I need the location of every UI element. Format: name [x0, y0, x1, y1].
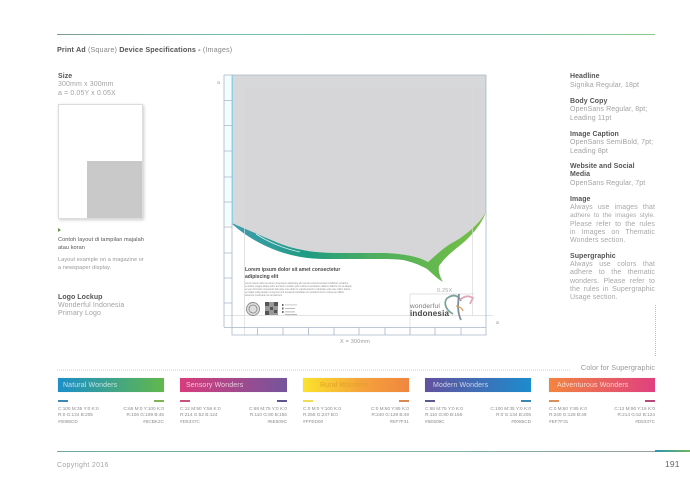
values: modern left: #6E509C: [425, 419, 445, 424]
website and social media specification: OpenSans Regular, 7pt: [570, 180, 645, 187]
supergraphic rules paragraph: the rules in Supergraphic: [570, 286, 655, 293]
values: rural left: R:255 G:237 B:0: [303, 412, 338, 417]
supergraphic swoosh: [232, 212, 486, 282]
ad body copy: et dolore magna aliqua enim ad minim veniam quis nostrud exercitation ullamco laboris nisi ut aliquip: [245, 285, 352, 288]
Wonderful Indonesia logo: wonderful: [409, 303, 440, 310]
ruler label right a: a: [496, 320, 499, 326]
values: rural right: [371, 406, 409, 424]
layout caption Indonesian: [58, 237, 144, 251]
values: sensory right: [249, 406, 287, 424]
image rules paragraph: in Images on Thematic: [570, 229, 655, 236]
layout caption Indonesian: Contoh layout di tampilan majalah: [58, 237, 144, 243]
values: sensory left: #D5337C: [180, 419, 200, 424]
values: adventurous left: C:0 M:60 Y:85 K:0: [549, 406, 587, 411]
image rules paragraph: Always use images that: [570, 204, 655, 211]
supergraphic rules paragraph: [570, 260, 655, 301]
values: rural right: R:240 G:128 B:49: [371, 412, 409, 417]
values: sensory right: R:110 G:80 B:156: [250, 412, 287, 417]
ad body copy: Lorem ipsum dolor sit amet consectetur adipiscing elit sed do eiusmod tempor incididunt ut labore: [245, 282, 349, 285]
swatch: Modern Wonders: Modern Wonders: [433, 382, 488, 389]
values: rural left: C:0 M:0 Y:100 K:0: [303, 406, 341, 411]
Wonderful Indonesia logo: indonesia: [410, 309, 449, 318]
chip: rural left: [303, 400, 313, 402]
badge icon: [246, 302, 260, 316]
values: adventurous left: [549, 406, 587, 424]
logo lockup specification: Wonderful Indonesia: [58, 302, 124, 309]
horizontal dotted rule: [57, 369, 571, 371]
image caption specification: [570, 130, 653, 155]
chip: natural right: [154, 400, 164, 402]
chip: modern right: [521, 400, 531, 402]
social media list: [282, 304, 297, 315]
swoosh highlight: [256, 234, 300, 252]
values: adventurous right: C:12 M:90 Y:16 K:0: [614, 406, 655, 411]
footer accent: [655, 450, 690, 452]
values: natural right: #6CBK2C: [143, 419, 164, 424]
body copy specification: [570, 98, 647, 122]
values: sensory right: C:68 M:75 Y:0 K:0: [249, 406, 287, 411]
values: modern right: R:0 G:134 B:205: [496, 412, 531, 417]
values: rural right: C:0 M:60 Y:85 K:0: [371, 406, 409, 411]
values: sensory right: #6E509C: [267, 419, 287, 424]
values: sensory left: R:214 G:52 B:124: [180, 412, 218, 417]
values: sensory left: C:12 M:90 Y:56 K:0: [180, 406, 221, 411]
title: Print Ad (Square) Device Specifications - (Images): [57, 45, 232, 54]
ad body copy: eu fugiat nulla pariatur excepteur sint occaecat cupidatat non proident sunt in culpa qui officia: [245, 291, 344, 294]
values: natural right: R:106 G:189 B:45: [126, 412, 164, 417]
supergraphic rules paragraph: adhere to the thematic: [570, 269, 655, 276]
layout caption English: a newspaper display.: [58, 265, 111, 271]
swatch: Natural Wonders: [58, 378, 164, 392]
chip: sensory left: [180, 400, 190, 402]
image rules paragraph: adhere to the images style.: [570, 212, 655, 219]
values: adventurous right: [614, 406, 655, 424]
size specification: a = 0.05Y x 0.05X: [58, 90, 116, 97]
values: sensory left: [180, 406, 221, 424]
image caption specification: Image Caption: [570, 131, 619, 138]
ruler label a: a: [217, 80, 221, 86]
values: adventurous right: R:214 G:52 B:124: [617, 412, 655, 417]
values: modern right: [490, 406, 531, 424]
swatch: Modern Wonders: [425, 378, 531, 392]
chip: natural left: [58, 400, 68, 402]
logo lockup specification: Logo Lockup: [58, 294, 102, 301]
values: natural left: R:0 G:134 B:205: [58, 412, 93, 417]
body copy specification: Leading 11pt: [570, 115, 611, 122]
layout caption English: [58, 257, 144, 271]
bleed tint: [232, 75, 486, 231]
swatch: Sensory Wonders: Sensory Wonders: [186, 382, 243, 389]
size specification: 300mm x 300mm: [58, 81, 114, 88]
image caption specification: OpenSans SemiBold, 7pt;: [570, 139, 653, 146]
image rules paragraph: Wonders section.: [570, 237, 626, 244]
supergraphic heading: Supergraphic: [570, 253, 616, 260]
dimension label: X = 300mm: [340, 339, 370, 345]
page number: 191: [665, 459, 680, 469]
values: natural right: [123, 406, 164, 424]
image caption specification: Leading 8pt: [570, 148, 608, 155]
body copy specification: Body Copy: [570, 98, 607, 105]
swatch: Rural Wonders: Rural Wonders: [320, 382, 368, 389]
ad body copy: ex ea commodo consequat duis aute irure dolor in reprehenderit in voluptate velit esse cillum dolore: [245, 288, 351, 291]
guide lines: [224, 75, 493, 335]
supergraphic rules paragraph: wonders. Please refer to: [570, 278, 655, 285]
margin label: 0.25X: [437, 288, 453, 294]
values: modern right: C:100 M:35 Y:0 K:0: [490, 406, 531, 411]
values: modern left: R:110 G:80 B:156: [425, 412, 462, 417]
values: rural left: [303, 406, 341, 424]
values: natural left: #0085CD: [58, 419, 78, 424]
color section label: Color for Supergraphic: [581, 363, 655, 372]
chip: rural right: [399, 400, 409, 402]
chip: modern left: [425, 400, 435, 402]
values: natural left: C:100 M:35 Y:0 K:0: [58, 406, 99, 411]
values: modern right: #0085CD: [511, 419, 531, 424]
chip: adventurous right: [645, 400, 655, 402]
header rule: [57, 34, 655, 35]
QR code: [265, 302, 278, 315]
ad image area: [232, 75, 486, 262]
size specification: [58, 72, 116, 97]
swatch: Adventurous Wonders: Adventurous Wonders: [557, 382, 628, 389]
chip: adventurous left: [549, 400, 559, 402]
values: modern left: [425, 406, 463, 424]
frame outline and rulers: [224, 75, 486, 335]
website and social media specification: Website and Social: [570, 163, 635, 170]
values: adventurous left: R:240 G:128 B:49: [549, 412, 587, 417]
swatch: Rural Wonders: [303, 378, 409, 392]
image heading: Image: [570, 196, 590, 203]
layout caption Indonesian: atau koran: [58, 245, 85, 251]
ad background: [232, 75, 486, 335]
layout preview thumbnail: [58, 104, 143, 219]
supergraphic rules paragraph: Always use colors that: [570, 261, 655, 268]
website and social media specification: [570, 162, 646, 187]
logo lockup specification: Primary Logo: [58, 310, 101, 317]
body copy specification: OpenSans Regular, 8pt;: [570, 106, 647, 113]
values: rural left: #FFED00: [303, 419, 323, 424]
left cyan bleed edge: [232, 75, 234, 224]
image rules paragraph: [570, 204, 655, 244]
values: modern left: C:68 M:75 Y:0 K:0: [425, 406, 463, 411]
size specification: Size: [58, 73, 72, 80]
copyright: Copyright 2016: [57, 462, 109, 469]
green pointer icon: [58, 228, 61, 232]
vertical dotted rule: [654, 305, 656, 356]
values: adventurous right: #D5337C: [635, 419, 655, 424]
swatch: Adventurous Wonders: [549, 378, 655, 392]
chip: sensory right: [277, 400, 287, 402]
values: rural right: #EF7F31: [390, 419, 409, 424]
footer rule: [57, 451, 655, 452]
ad body copy: deserunt mollit anim id est laborum: [245, 294, 282, 297]
swatch: Sensory Wonders: [180, 378, 287, 392]
website and social media specification: Media: [570, 171, 590, 178]
headline specification: Signika Regular, 18pt: [570, 82, 639, 89]
layout caption English: Layout example on a magazine or: [58, 257, 144, 263]
Wonderful Indonesia logo: [409, 294, 473, 320]
values: adventurous left: #EF7F31: [549, 419, 568, 424]
supergraphic rules paragraph: Usage section.: [570, 294, 618, 301]
values: natural left: [58, 406, 99, 424]
headline specification: [570, 72, 639, 89]
logo lockup specification: [58, 294, 124, 317]
pale cyan bleed strip: [224, 75, 232, 225]
ad headline: Lorem ipsum dolor sit amet consectetur: [245, 267, 340, 273]
swatch: Natural Wonders: Natural Wonders: [63, 382, 117, 389]
image rules paragraph: Please refer to the rules: [570, 221, 655, 228]
preview ad placement: [87, 161, 142, 218]
headline specification: Headline: [570, 73, 600, 80]
values: natural right: C:65 M:0 Y:100 K:0: [123, 406, 164, 411]
ad headline: adipiscing elit: [245, 274, 279, 280]
